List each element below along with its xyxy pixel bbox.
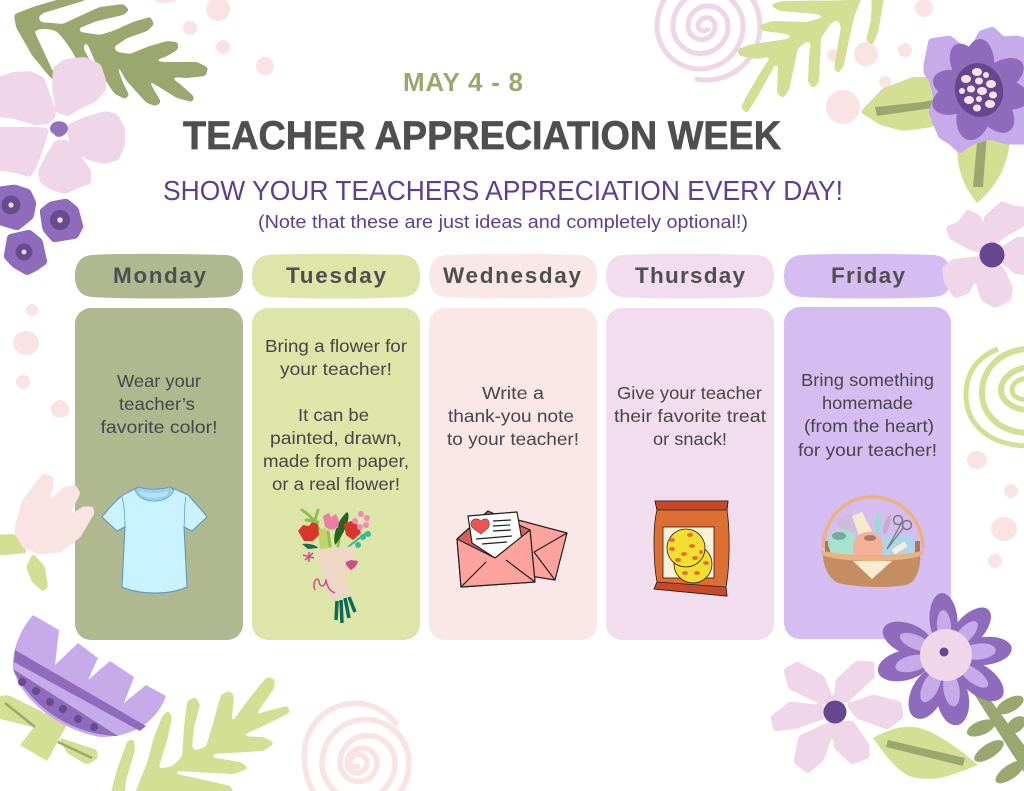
flower: large purple top right: [860, 28, 1024, 203]
date: MAY 4 - 8: [403, 67, 523, 97]
spiral: pink bottom: [304, 703, 409, 791]
panel: Monday: [75, 254, 243, 640]
spiral: pink top: [657, 0, 760, 80]
sprig: olive bottom right: [963, 675, 1024, 787]
panel: Friday: Friday: [831, 263, 905, 288]
panel: Wednesday: Write a: [482, 383, 544, 403]
panel: Tuesday: your teacher!: [280, 359, 392, 379]
panel: Tuesday: painted, drawn,: [270, 428, 402, 448]
leaf: lower: [957, 133, 1010, 203]
panel: Friday: for your teacher!: [798, 440, 937, 460]
panel: Thursday: Give your teacher: [617, 383, 762, 403]
icon: bouquet: [298, 510, 371, 623]
fern: bottom: [110, 678, 289, 791]
panel: Wednesday: to your teacher!: [447, 429, 579, 449]
title block: [163, 67, 843, 232]
icon: basket: [821, 497, 924, 587]
leaf: bottom right: [873, 727, 978, 779]
flower: pink top left: [0, 58, 124, 193]
flower: pink right: [943, 202, 1024, 307]
panel: Wednesday: [429, 254, 597, 640]
leaf: left: [860, 77, 950, 131]
flower: pink bottom right: [772, 662, 902, 772]
panel: Thursday: their favorite treat: [614, 406, 766, 426]
panel: Tuesday: made from paper,: [263, 451, 409, 471]
panel: Monday: teacher’s: [119, 394, 195, 414]
panel: Wednesday: Wednesday: [443, 263, 581, 288]
icon: t-shirt: [102, 487, 207, 593]
panel: Tuesday: It can be: [298, 405, 369, 425]
leaves and stem: [0, 695, 98, 765]
flower: purple bottom right: [874, 592, 1013, 728]
panel: Tuesday: Tuesday: [286, 263, 386, 288]
panel: Friday: Bring something: [801, 370, 934, 390]
background dots: [13, 0, 1018, 568]
subtitle: SHOW YOUR TEACHERS APPRECIATION EVERY DAY!: [163, 175, 843, 206]
panel: Friday: (from the heart): [804, 416, 934, 436]
panel: Monday: Wear your: [117, 371, 201, 391]
flowers: three small purple: [0, 185, 83, 275]
icon: cookie bag: [654, 501, 729, 596]
panel: Tuesday: Bring a flower for: [265, 336, 407, 356]
panel: Monday: Monday: [113, 263, 206, 288]
fern: top left: [15, 0, 207, 105]
panel: Tuesday: [252, 254, 420, 640]
panel: Tuesday: or a real flower!: [272, 474, 400, 494]
title: TEACHER APPRECIATION WEEK: [183, 114, 781, 158]
panel: Wednesday: thank-you note: [448, 406, 574, 426]
leaves: [0, 534, 48, 592]
panel: Friday: [784, 254, 951, 639]
flower: tulip left: [0, 474, 94, 592]
panel: Thursday: [606, 254, 774, 640]
spiral: green right: [966, 349, 1024, 446]
panel: Friday: homemade: [822, 393, 913, 413]
note: (Note that these are just ideas and completely optional!): [258, 212, 748, 232]
fern: top right: [738, 0, 884, 112]
panel: Thursday: Thursday: [635, 263, 745, 288]
panel: Monday: favorite color!: [100, 417, 218, 437]
icon: envelope: [457, 511, 567, 587]
panel: Thursday: or snack!: [653, 429, 727, 449]
flower: bottom-left purple: [0, 615, 166, 765]
